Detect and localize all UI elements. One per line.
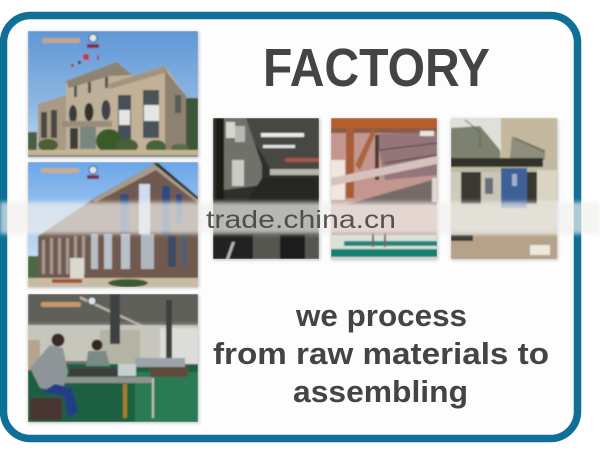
caption text: from raw materials to (213, 336, 549, 371)
far workers (135, 358, 185, 367)
title: FACTORY (263, 38, 490, 98)
caption text: assembling (293, 374, 468, 409)
windows (118, 95, 131, 140)
watermark band (0, 202, 600, 234)
panel: brick office building photo (28, 162, 198, 287)
panel: headquarters building photo (28, 31, 198, 157)
left wing (38, 95, 70, 150)
panel: assembly workshop photo (28, 294, 198, 422)
second worker (92, 340, 102, 350)
centre block (65, 74, 132, 151)
shrubs (96, 129, 122, 153)
caption text (213, 298, 549, 409)
panel: steel workshop photo (331, 118, 437, 259)
caption text: we process (295, 298, 467, 333)
panel: factory hall photo (213, 118, 319, 259)
photo shadows (28, 32, 558, 423)
logos (41, 302, 81, 307)
worker in front (30, 345, 68, 392)
watermark text: trade.china.cn (206, 206, 396, 234)
right wing (131, 67, 184, 151)
logos (42, 38, 80, 43)
logos (41, 168, 79, 173)
panel: blow moulding machine photo (451, 118, 557, 259)
